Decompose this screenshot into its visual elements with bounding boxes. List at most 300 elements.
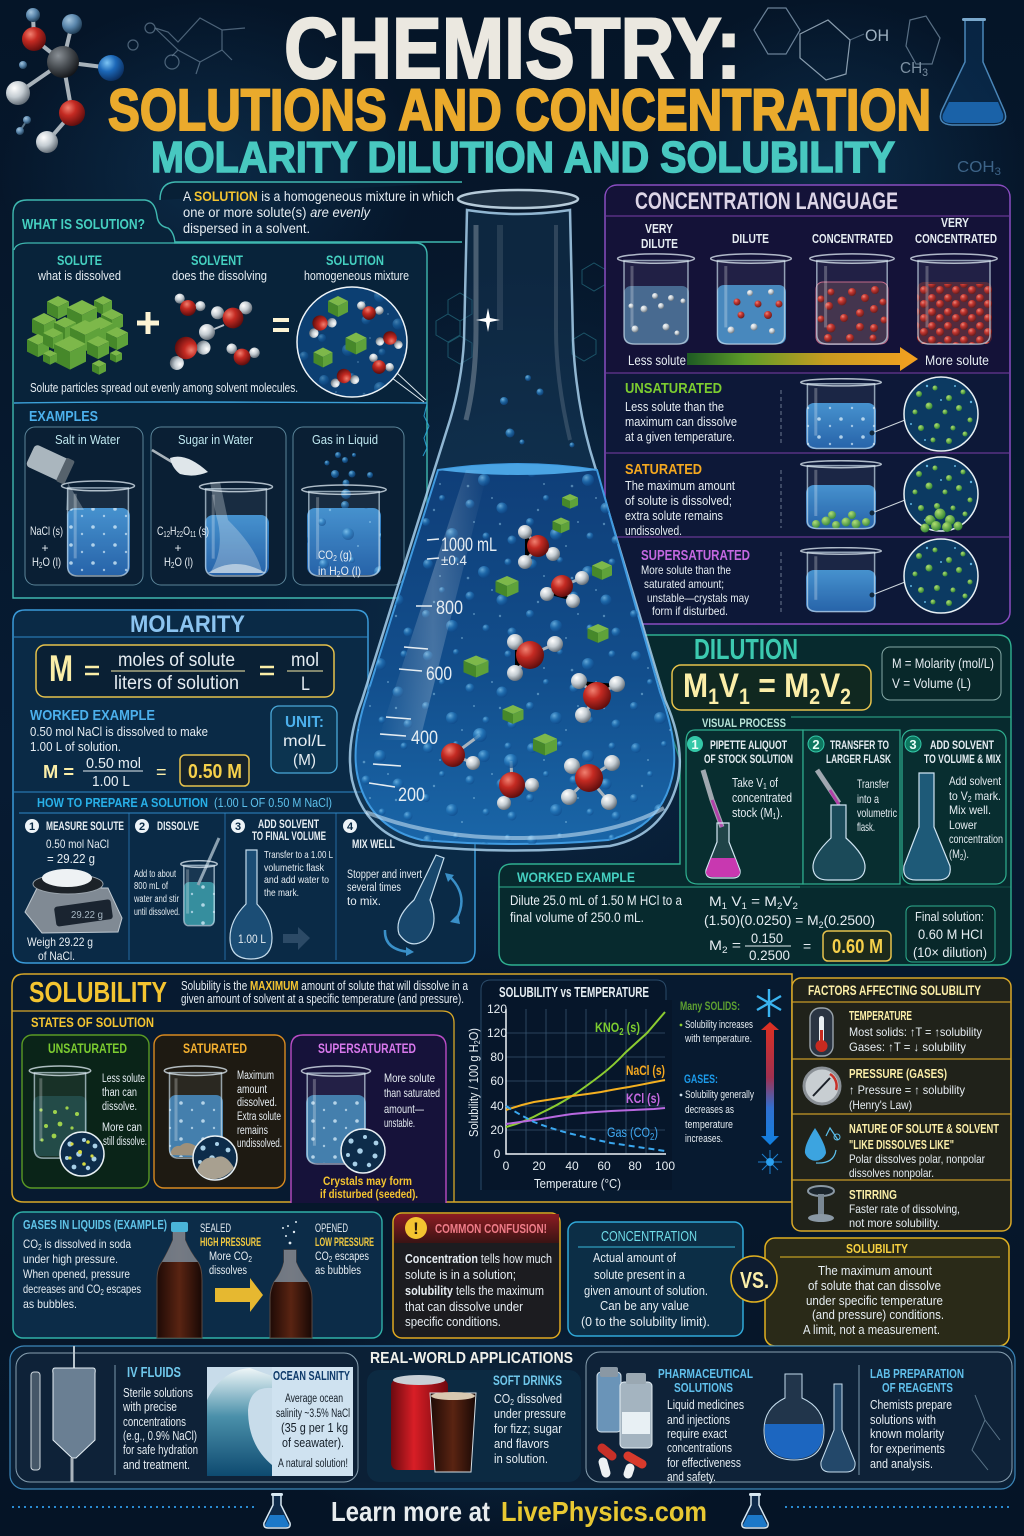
example: gas in liquid: in H — [318, 564, 339, 578]
chart: solubility vs temperature: 0 — [494, 1147, 501, 1161]
dilution step 1: OF STOCK SOLUTION — [704, 754, 793, 766]
dilution step 2: TRANSFER TO — [830, 740, 889, 752]
icon: top right flask — [940, 18, 1006, 125]
panel: solubility — [12, 974, 792, 1203]
dilution step 1: of — [767, 776, 778, 790]
solvent column: SOLVENT — [191, 252, 243, 268]
worked example: molarity: 0.50 mol NaCl is dissolved to make — [30, 724, 208, 739]
application: lab preparation of reagents: OF REAGENTS — [882, 1380, 953, 1395]
flask graduations: 1000 mL — [441, 535, 497, 556]
application: IV fluids: concentrations — [123, 1415, 186, 1429]
application: lab preparation of reagents: and analysis. — [870, 1457, 933, 1471]
state card: supersaturated — [291, 1035, 446, 1203]
dilution step 3: ). — [963, 847, 969, 861]
panel: common confusion: ! — [413, 1219, 419, 1238]
worked example: molarity: = — [156, 762, 167, 782]
application: pharmaceutical solutions: for effectiveness — [667, 1456, 741, 1470]
dilution step 1: ). — [776, 806, 783, 820]
application: ocean salinity — [207, 1367, 353, 1476]
solution column: homogeneous mixture — [304, 269, 409, 283]
application: lab preparation of reagents: solutions with — [870, 1413, 936, 1427]
molarity formula: liters of solution — [114, 673, 239, 694]
application: ocean salinity: salinity ~3.5% NaCl — [276, 1408, 350, 1420]
state card: supersaturated: More solute — [384, 1071, 435, 1085]
panel: solution definition: one or more solute(s) are evenly — [183, 204, 371, 220]
chart: solubility vs temperature: 40 — [490, 1099, 504, 1113]
state card: saturated — [154, 1035, 285, 1188]
step 4: mix well: several times — [347, 882, 401, 894]
chart: solubility vs temperature: 120 — [487, 1026, 507, 1040]
step 2: dissolve: Add to about — [134, 869, 176, 880]
panel: concentration definition — [568, 1222, 743, 1336]
worked example: dilution: = — [728, 937, 741, 953]
dilution step 3: mark. — [972, 789, 1001, 803]
state card: saturated: Extra solute — [237, 1111, 281, 1123]
panel: concentration definition: given amount of solution. — [584, 1284, 708, 1298]
how to prepare heading — [37, 795, 332, 810]
example: sugar in water: (s) — [196, 524, 209, 538]
factor: pressure: PRESSURE (GASES) — [849, 1066, 947, 1081]
state card: supersaturated: Crystals may form — [323, 1174, 412, 1188]
concentration beakers: CONCENTRATED — [812, 232, 893, 246]
worked example: dilution: Dilute 25.0 mL of 1.50 M HCl to a — [510, 893, 682, 908]
worked example: molarity: 1.00 L of solution. — [30, 739, 121, 754]
example: salt in water: Salt in Water — [55, 432, 121, 447]
application: soft drinks: dissolved — [514, 1392, 562, 1406]
arrow: less to more solute: Less solute — [628, 353, 686, 368]
example: sugar in water: 11 — [190, 530, 197, 539]
panel: gases in liquids: When opened, pressure — [23, 1267, 130, 1281]
step 3: add solvent: volumetric flask — [264, 862, 325, 874]
chart: solubility vs temperature — [467, 980, 675, 1191]
step 4: mix well — [343, 819, 461, 956]
worked example: molarity: 0.50 mol — [86, 755, 141, 772]
unit box: UNIT: — [285, 714, 324, 731]
chart notes: Many SOLIDS: — [680, 1001, 740, 1013]
example: salt in water — [25, 427, 143, 585]
step 2: dissolve: water and stir — [133, 894, 179, 905]
title: MOLARITY DILUTION AND SOLUBILITY — [151, 133, 895, 182]
state card: saturated: amount — [237, 1084, 268, 1096]
title — [108, 1, 931, 182]
dilution formula: V — [820, 667, 840, 705]
chart: solubility vs temperature: Temperature (°C) — [534, 1176, 621, 1191]
flask graduations — [369, 535, 497, 806]
factor: pressure: ↑ Pressure = ↑ solubility — [849, 1083, 965, 1097]
footer: Learn more at — [331, 1496, 490, 1527]
state card: supersaturated: unstable. — [384, 1116, 415, 1130]
dilution step 3: (M — [949, 847, 963, 861]
step 1: measure solute: 29.22 g — [71, 910, 103, 921]
state card: unsaturated: UNSATURATED — [48, 1041, 127, 1056]
label: OH and CH3 sketches — [865, 26, 1001, 178]
worked example: dilution: 0.2500 — [749, 947, 790, 963]
state card: supersaturated: SUPERSATURATED — [318, 1041, 416, 1056]
step 4: mix well: 4 — [347, 821, 354, 833]
flask graduations: ±0.4 — [441, 552, 467, 568]
panel: common confusion: COMMON CONFUSION! — [435, 1221, 547, 1236]
application: IV fluids: with precise — [122, 1400, 177, 1414]
concentration beakers: CONCENTRATED — [915, 232, 997, 246]
label: OH and CH3 sketches: CH — [900, 60, 923, 77]
row: supersaturated: SUPERSATURATED — [641, 547, 750, 564]
chart notes: decreases as — [685, 1104, 734, 1116]
factor: nature of solute and solvent — [805, 1122, 999, 1180]
state card: supersaturated: if disturbed (seeded). — [320, 1187, 418, 1201]
panel: common confusion — [393, 1213, 560, 1338]
dilution formula — [672, 665, 871, 710]
chart notes: with temperature. — [684, 1033, 752, 1045]
solvent column — [161, 252, 267, 373]
unit box — [271, 706, 337, 773]
example: gas in liquid — [293, 427, 404, 585]
panel: molarity: MOLARITY — [130, 611, 245, 638]
factor: temperature: Gases: ↑T = ↓ solubility — [849, 1040, 966, 1054]
worked example: dilution: 1 — [722, 901, 727, 911]
panel: concentration language — [605, 185, 1010, 624]
solution column: SOLUTION — [326, 252, 384, 268]
row: saturated: SATURATED — [625, 461, 702, 478]
row: supersaturated: saturated amount; — [644, 577, 724, 591]
how to prepare heading: HOW TO PREPARE A SOLUTION — [37, 795, 208, 810]
panel: solubility: Solubility is the MAXIMUM amount of solute that will dissolve in a — [181, 979, 468, 993]
application: IV fluids: Sterile solutions — [123, 1386, 193, 1400]
example: gas in liquid: Gas in Liquid — [312, 432, 378, 447]
example: gas in liquid: CO — [318, 548, 336, 562]
chart notes: Solubility generally — [685, 1089, 754, 1101]
example: sugar in water: 22 — [176, 530, 183, 539]
panel: molarity — [13, 610, 475, 963]
worked example: dilution: 0.60 M — [832, 936, 883, 958]
label: OH and CH3 sketches: 3 — [922, 67, 928, 79]
arrow: sealed to opened — [215, 1278, 263, 1312]
worked example: dilution: 2 — [722, 945, 728, 955]
application: lab preparation of reagents: Chemists prepare — [870, 1398, 952, 1412]
worked example: dilution: WORKED EXAMPLE — [517, 869, 635, 885]
application: IV fluids: for safe hydration — [123, 1443, 198, 1457]
example: salt in water: + — [41, 541, 49, 555]
panel: solubility definition: A limit, not a measurement. — [803, 1323, 940, 1337]
application: pharmaceutical solutions — [597, 1366, 753, 1484]
dilution step 2: flask. — [857, 820, 875, 834]
flask graduations: 200 — [398, 785, 425, 806]
application: pharmaceutical solutions: and safety. — [667, 1470, 716, 1484]
arrow: less to more solute — [628, 347, 989, 371]
flask molecules and crystals — [441, 494, 625, 810]
dilution step 1 — [686, 730, 803, 884]
panel: solution definition: A SOLUTION is a homogeneous mixture in which — [183, 188, 454, 204]
title: CHEMISTRY: — [284, 1, 741, 97]
dilution formula: 2 — [809, 684, 820, 709]
step 1: measure solute: MEASURE SOLUTE — [46, 821, 124, 833]
dilution formula: 1 — [739, 684, 750, 709]
worked example: dilution — [510, 869, 995, 963]
badge: VS — [731, 1256, 777, 1302]
application: soft drinks: CO — [494, 1392, 513, 1406]
concentration beakers — [618, 216, 997, 344]
solvent column: does the dissolving — [172, 269, 267, 283]
panel: gases in liquids: 2 — [100, 1288, 104, 1297]
panel: gases in liquids: decreases and CO — [23, 1282, 123, 1296]
panel: gases in liquids: More CO — [209, 1251, 256, 1263]
example: salt in water: O (l) — [42, 555, 61, 569]
panel: gases in liquids: escapes — [332, 1251, 369, 1263]
state card: saturated: SATURATED — [183, 1041, 247, 1056]
molarity formula: L — [301, 674, 310, 695]
panel: solubility definition: under specific temperature — [806, 1294, 943, 1308]
label: OH and CH3 sketches: OH — [865, 26, 889, 45]
factor: nature of solute and solvent: Polar dissolves polar, nonpolar — [849, 1152, 985, 1166]
factor: stirring — [808, 1186, 960, 1230]
state card: unsaturated: still dissolve. — [103, 1136, 147, 1148]
panel: what is solution: Solute particles spread out evenly among solvent molecules. — [30, 380, 298, 395]
row: supersaturated: More solute than the — [641, 563, 731, 577]
solute column — [27, 252, 128, 375]
panel: concentration definition: solute present in a — [594, 1268, 685, 1282]
factor: stirring: STIRRING — [849, 1187, 897, 1202]
row: supersaturated: form if disturbed. — [652, 604, 728, 618]
panel: concentration definition: Can be any value — [600, 1299, 689, 1313]
icon: temperature arrow — [757, 989, 782, 1174]
application: soft drinks — [391, 1373, 566, 1472]
chart: solubility vs temperature: 40 — [565, 1159, 579, 1173]
row: saturated: extra solute remains — [625, 508, 723, 523]
factor: stirring: Faster rate of dissolving, — [849, 1202, 960, 1216]
chart: solubility vs temperature: 20 — [532, 1159, 546, 1173]
state card: unsaturated: More can — [102, 1122, 142, 1134]
chart: solubility vs temperature: SOLUBILITY vs TEMPERATURE — [499, 985, 649, 1001]
example: sugar in water: O — [183, 524, 190, 538]
step 3: add solvent: 3 — [235, 821, 241, 833]
panel: solubility definition: (and pressure) conditions. — [812, 1308, 944, 1322]
application: lab preparation of reagents: LAB PREPARATION — [870, 1366, 964, 1381]
panel: solution definition — [160, 182, 462, 242]
step 4: mix well: MIX WELL — [352, 839, 395, 851]
solute column: SOLUTE — [57, 252, 102, 268]
step 1: measure solute: 0.50 mol NaCl — [46, 837, 109, 851]
arrow: less to more solute: More solute — [925, 353, 989, 368]
dilution legend: V = Volume (L) — [892, 676, 971, 691]
label: OH and CH3 sketches: 3 — [995, 166, 1001, 178]
step 2: dissolve — [133, 819, 219, 926]
application: ocean salinity: Average ocean — [285, 1393, 343, 1405]
example: sugar in water: H — [170, 524, 176, 538]
worked example: dilution: (0.2500) — [824, 912, 875, 928]
application: soft drinks: SOFT DRINKS — [493, 1373, 562, 1388]
worked example: molarity — [30, 707, 249, 790]
worked example: dilution: Final solution: — [915, 909, 984, 924]
dilution step 3: Add solvent — [949, 774, 1002, 788]
application: pharmaceutical solutions: SOLUTIONS — [674, 1380, 733, 1395]
example: gas in liquid: 2 — [337, 570, 341, 579]
row: unsaturated: UNSATURATED — [625, 380, 722, 397]
step 3: add solvent — [230, 819, 333, 959]
dilution step 3: 2 — [960, 853, 964, 862]
panel: dilution: DILUTION — [694, 634, 798, 666]
row: saturated: The maximum amount — [625, 478, 735, 493]
solution column — [297, 252, 426, 402]
application: soft drinks: under pressure — [494, 1407, 566, 1421]
unit box: (M) — [293, 752, 316, 769]
panel: gases in liquids: escapes — [104, 1282, 141, 1296]
panel: gases in liquids: as bubbles — [315, 1265, 361, 1277]
worked example: dilution: M — [709, 893, 721, 909]
footer: LivePhysics.com — [501, 1496, 707, 1527]
application: soft drinks: for fizz; sugar — [494, 1422, 562, 1436]
worked example: dilution: = — [803, 938, 811, 954]
step 3: add solvent: Transfer to a 1.00 L — [264, 849, 333, 861]
application: lab preparation of reagents: for experiments — [870, 1442, 945, 1456]
panel: real-world applications: REAL-WORLD APPLICATIONS — [370, 1350, 573, 1367]
dilution formula: M — [683, 667, 711, 705]
dilution step 1: stock (M — [732, 806, 779, 820]
dilution step 3: Lower — [949, 818, 977, 832]
step 2: dissolve: 2 — [139, 821, 145, 833]
application: lab preparation of reagents: known molarity — [870, 1427, 945, 1441]
factor: pressure: (Henry's Law) — [849, 1098, 912, 1112]
step 3: add solvent: ADD SOLVENT — [258, 819, 319, 831]
worked example: dilution: (1.50)(0.0250) = M — [704, 912, 820, 928]
factor: nature of solute and solvent: "LIKE DISSOLVES LIKE" — [849, 1138, 954, 1152]
dilution step 1: PIPETTE ALIQUOT — [710, 740, 787, 752]
dilution step 1: concentrated — [732, 791, 792, 805]
example: gas in liquid: 2 — [333, 554, 337, 563]
dilution step 3: ADD SOLVENT — [930, 740, 994, 752]
state card: saturated: dissolved. — [237, 1097, 277, 1109]
step 2: dissolve: until dissolved. — [134, 907, 180, 918]
example: sugar in water: 12 — [163, 530, 170, 539]
panel: common confusion: specific conditions. — [405, 1314, 501, 1329]
panel: gases in liquids — [13, 1212, 382, 1338]
example: sugar in water: H — [164, 555, 173, 569]
chart: solubility vs temperature: 80 — [628, 1159, 642, 1173]
example: gas in liquid: O (l) — [341, 564, 361, 578]
application: pharmaceutical solutions: and injections — [667, 1413, 730, 1427]
dilution step 1: Take V — [732, 776, 770, 790]
molarity formula — [36, 645, 334, 697]
chart: solubility vs temperature: O) — [467, 1028, 481, 1040]
chart: solubility vs temperature: 2 — [619, 1027, 624, 1038]
row: supersaturated: unstable—crystals may — [647, 591, 749, 605]
step 1: measure solute: Weigh 29.22 g — [27, 935, 93, 949]
panel: gases in liquids: SEALED — [200, 1223, 231, 1235]
panel: what is solution — [13, 200, 427, 598]
state card: unsaturated: than can — [102, 1087, 137, 1099]
worked example: molarity: M = — [43, 762, 74, 782]
application: lab preparation of reagents — [764, 1365, 1000, 1475]
concentration beakers: VERY — [645, 222, 674, 236]
worked example: dilution: 2 — [819, 920, 824, 930]
dilution step 1: 1 — [763, 782, 767, 791]
chart: solubility vs temperature: (s) — [624, 1019, 640, 1035]
chart: solubility vs temperature: 60 — [490, 1074, 504, 1088]
step 1: measure solute: 1 — [29, 821, 35, 833]
example: salt in water: H — [32, 555, 41, 569]
chart: solubility vs temperature: 120 — [487, 1002, 507, 1016]
panel: what is solution: WHAT IS SOLUTION? — [22, 216, 145, 233]
molarity formula: moles of solute — [118, 650, 235, 671]
application: ocean salinity: of seawater). — [282, 1436, 344, 1450]
application: soft drinks: 2 — [510, 1398, 514, 1407]
chart notes: Solubility increases — [685, 1019, 753, 1031]
icon: opened bottle — [270, 1221, 312, 1338]
chart: solubility vs temperature: KNO — [595, 1019, 626, 1035]
panel: gases in liquids: CO — [315, 1251, 332, 1263]
icon: equals — [273, 320, 289, 330]
icon: glass sparkle — [476, 308, 500, 332]
footer — [12, 1493, 1010, 1528]
example: sugar in water: 2 — [171, 561, 175, 570]
central flask illustration — [350, 190, 680, 850]
worked example: dilution: 0.60 M HCI — [918, 926, 983, 942]
unit box: mol/L — [283, 733, 326, 750]
panel: concentration definition: CONCENTRATION — [601, 1229, 697, 1245]
state card: supersaturated: than saturated — [384, 1086, 440, 1100]
example: sugar in water — [151, 427, 286, 585]
application: soft drinks: in solution. — [494, 1452, 548, 1466]
step 3: add solvent: TO FINAL VOLUME — [252, 831, 326, 843]
dilution step 3: concentration — [949, 832, 1003, 846]
panel: gases in liquids: GASES IN LIQUIDS (EXAMPLE) — [23, 1218, 167, 1232]
dilution formula: = M — [750, 667, 809, 705]
example: sugar in water: + — [174, 541, 182, 555]
decorative molecular sketches — [128, 8, 940, 80]
panel: concentration definition: Actual amount of — [593, 1251, 676, 1265]
panel: gases in liquids: CO — [23, 1237, 41, 1251]
step 3: add solvent: the mark. — [264, 887, 299, 899]
panel: dilution — [499, 634, 1011, 965]
state card: saturated: remains — [237, 1125, 268, 1137]
dilution step 2 — [803, 730, 900, 884]
chart: solubility vs temperature: KCl (s) — [626, 1090, 660, 1106]
row: supersaturated — [641, 539, 978, 618]
flask graduations: 800 — [436, 598, 463, 619]
application: soft drinks: and flavors — [494, 1437, 549, 1451]
panel: solubility: SOLUBILITY — [29, 977, 167, 1009]
panel: factors affecting solubility — [792, 978, 1011, 1231]
panel: common confusion: that can dissolve under — [405, 1299, 524, 1314]
row: unsaturated: Less solute than the — [625, 399, 724, 414]
chart: solubility vs temperature: Solubility / 100 g H — [467, 1033, 481, 1137]
factor: temperature: TEMPERATURE — [849, 1008, 912, 1023]
worked example: molarity: 0.50 M — [188, 761, 242, 783]
panel: solubility definition: The maximum amount — [818, 1264, 932, 1278]
panel: solution definition: dispersed in a solvent. — [183, 220, 310, 236]
panel: solubility definition: of solute that can dissolve — [808, 1279, 941, 1293]
panel: dilution: VISUAL PROCESS — [702, 716, 786, 730]
dilution formula: 2 — [840, 684, 851, 709]
panel: gases in liquids: 2 — [329, 1255, 333, 1264]
panel: concentration language: CONCENTRATION LANGUAGE — [635, 188, 898, 215]
panel: solubility definition — [765, 1238, 1009, 1346]
panel: real-world applications — [10, 1346, 1015, 1489]
example: sugar in water: O (l) — [174, 555, 193, 569]
panel: gases in liquids: LOW PRESSURE — [315, 1237, 374, 1249]
dilution step 3: 3 — [909, 737, 917, 752]
panel: gases in liquids: HIGH PRESSURE — [200, 1237, 261, 1249]
dilution step 1: 1 — [691, 737, 699, 752]
example: gas in liquid: (g) — [337, 548, 352, 562]
panel: concentration definition: (0 to the solubility limit). — [581, 1315, 710, 1329]
panel: common confusion: solute is in a solution; — [405, 1267, 516, 1282]
factor: pressure — [804, 1066, 965, 1112]
worked example: dilution: 0.150 — [751, 930, 783, 946]
step 2: dissolve: 800 mL of — [134, 881, 168, 892]
dilution step 1: 1 — [773, 812, 777, 821]
example: sugar in water: Sugar in Water — [178, 432, 254, 447]
dilution step 2: 2 — [812, 737, 820, 752]
step 1: measure solute — [25, 819, 124, 963]
